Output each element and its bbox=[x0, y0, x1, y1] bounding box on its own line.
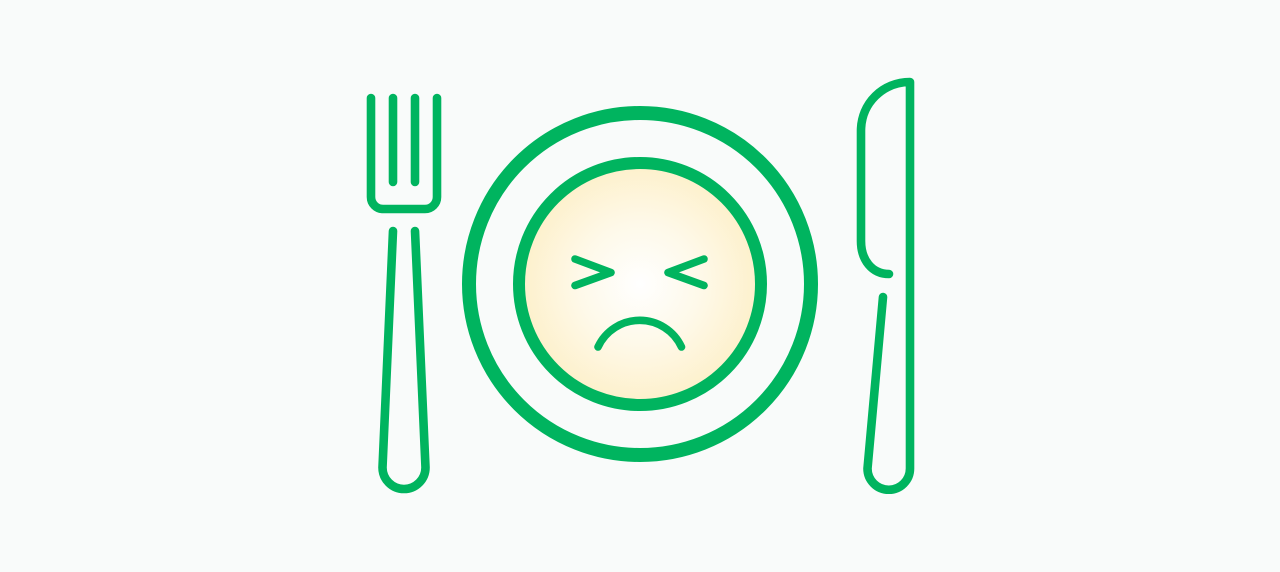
icon: fork bbox=[371, 98, 437, 489]
frowning mouth bbox=[598, 320, 682, 347]
right squinting eye bbox=[668, 259, 704, 286]
left squinting eye bbox=[575, 259, 611, 286]
icon: knife bbox=[861, 82, 910, 490]
icon: sad face bbox=[519, 163, 761, 405]
icon: plate outer rim bbox=[469, 113, 811, 455]
